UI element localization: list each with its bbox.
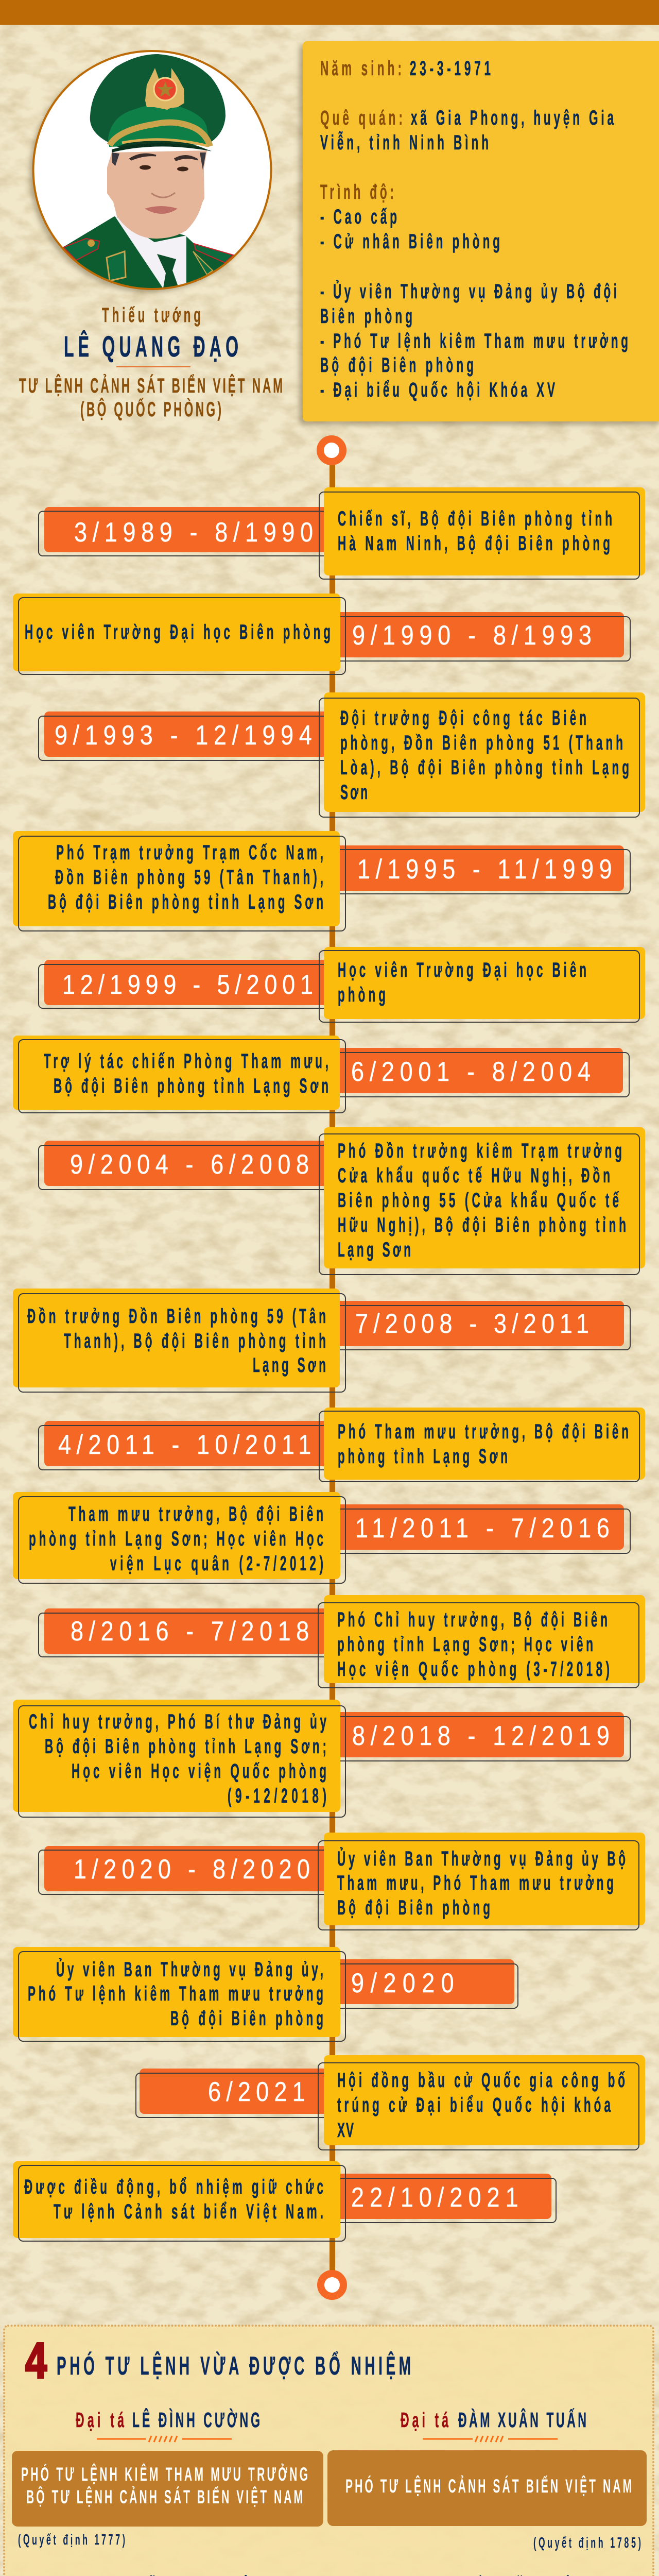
timeline entry 3/1989: Hà Nam Ninh, Bộ đội Biên phòng [338,532,610,555]
timeline entry 9/1993: Lòa), Bộ đội Biên phòng tỉnh Lạng [340,756,629,779]
timeline entry 9/2004: 9/2004 - 6/2008 [70,1149,309,1180]
timeline entry 22/10/2021: 22/10/2021 [351,2182,518,2213]
timeline entry 8/2018: Học viên Học viện Quốc phòng [72,1759,326,1783]
timeline entry 9/1993: Sơn [340,781,368,804]
timeline entry 6/2001: 6/2001 - 8/2004 [351,1057,591,1087]
timeline entry 8/2016: 8/2016 - 7/2018 [71,1616,309,1647]
panel: biography: xã Gia Phong, huyện Gia [411,106,614,129]
timeline entry 11/2011: phòng tỉnh Lạng Sơn; Học viên Học [29,1527,323,1550]
portrait photo [33,51,271,294]
timeline axis [330,453,335,2272]
timeline entry 8/2016: phòng tỉnh Lạng Sơn; Học viên [337,1633,593,1656]
person name: LÊ QUANG ĐẠO [64,330,238,363]
panel: biography: - Đại biểu Quốc hội Khóa XV [320,378,555,401]
timeline entry 22/10/2021: Được điều động, bổ nhiệm giữ chức [24,2175,323,2198]
timeline entry 4/2011: Phó Tham mưu trưởng, Bộ đội Biên [338,1420,629,1443]
timeline start marker [320,439,343,462]
timeline entry 9/1993: phòng, Đồn Biên phòng 51 (Thanh [340,731,623,754]
timeline entry 11/2011: 11/2011 - 7/2016 [355,1513,610,1544]
timeline entry 1/1995: 1/1995 - 11/1999 [357,854,612,885]
card: Đàm Xuân Tuấn: (Quyết định 1785) [533,2534,641,2551]
card: Lê Đình Cường: (Quyết định 1777) [18,2531,125,2548]
timeline entry 22/10/2021: Tư lệnh Cảnh sát biển Việt Nam. [54,2200,323,2223]
timeline entry 1/2020: Tham mưu, Phó Tham mưu trưởng [337,1871,614,1894]
timeline entry 9/1990: Học viên Trường Đại học Biên phòng [25,620,331,643]
timeline entry 3/1989 [39,487,645,579]
timeline entry 12/1999: phòng [338,983,386,1006]
timeline entry 9/2020: Bộ đội Biên phòng [170,2007,323,2030]
timeline entry 11/2011: viện Lục quân (2-7/2012) [110,1552,323,1575]
timeline entry 9/1990 [13,594,630,674]
timeline entry 1/1995: Bộ đội Biên phòng tỉnh Lạng Sơn [48,890,323,913]
panel: biography: - Cử nhân Biên phòng [320,230,500,253]
top bar [0,0,659,25]
timeline entry 6/2021: trúng cử Đại biểu Quốc hội khóa [337,2093,611,2116]
panel: biography: Biên phòng [320,304,412,328]
timeline entry 6/2001: Trợ lý tác chiến Phòng Tham mưu, [44,1049,328,1073]
timeline entry 7/2008 [13,1289,630,1392]
heading: PHÓ TƯ LỆNH VỪA ĐƯỢC BỔ NHIỆM [57,2350,411,2380]
card: Lê Đình Cường: LÊ ĐÌNH CƯỜNG [132,2408,260,2432]
panel: biography: - Phó Tư lệnh kiêm Tham mưu trưởng [320,329,628,352]
timeline entry 22/10/2021 [13,2161,556,2241]
timeline entry 8/2018 [13,1700,630,1817]
timeline entry 12/1999: Học viên Trường Đại học Biên [338,958,586,981]
heading number: 4 [25,2333,47,2388]
panel: biography: - Ủy viên Thường vụ Đảng ủy Bộ đội [320,279,617,303]
timeline entry 1/2020: Bộ đội Biên phòng [337,1896,490,1919]
timeline entry 8/2018: (9-12/2018) [228,1784,326,1807]
panel: biography: 23-3-1971 [410,57,491,80]
timeline entry 9/2004 [39,1127,645,1275]
timeline entry 3/1989: 3/1989 - 8/1990 [74,517,313,548]
card: Đàm Xuân Tuấn [327,2408,647,2551]
timeline entry 9/1993: Đội trưởng Đội công tác Biên [340,706,586,730]
card: Trần Văn Xuân [327,2575,645,2576]
timeline entry 6/2001: Bộ đội Biên phòng tỉnh Lạng Sơn [54,1074,328,1097]
panel: biography: Năm sinh: [320,57,402,80]
timeline entry 7/2008: 7/2008 - 3/2011 [355,1309,589,1339]
timeline entry 11/2011 [13,1492,630,1583]
timeline entry 9/2020 [13,1947,518,2041]
timeline entry 1/1995: Đồn Biên phòng 59 (Tân Thanh), [55,866,323,889]
timeline entry 6/2021: XV [337,2119,354,2142]
timeline entry 6/2001 [13,1036,629,1113]
timeline entry 3/1989: Chiến sĩ, Bộ đội Biên phòng tỉnh [338,507,612,530]
timeline entry 8/2018: Chỉ huy trưởng, Phó Bí thư Đảng ủy [29,1710,326,1733]
timeline entry 9/1993 [39,692,645,817]
timeline entry 9/1990: 9/1990 - 8/1993 [352,620,592,651]
timeline entry 9/2004: Phó Đồn trưởng kiêm Trạm trưởng [338,1139,622,1162]
timeline entry 4/2011 [39,1408,645,1482]
card: Đàm Xuân Tuấn: PHÓ TƯ LỆNH CẢNH SÁT BIỂN VIỆT NAM [345,2476,632,2497]
timeline entry 6/2021: Hội đồng bầu cử Quốc gia công bố [337,2069,625,2092]
card: Lê Đình Cường: BỘ TƯ LỆNH CẢNH SÁT BIỂN VIỆT NAM [26,2486,303,2508]
timeline entry 12/1999 [39,947,645,1022]
timeline entry 4/2011: 4/2011 - 10/2011 [58,1430,311,1460]
timeline entry 6/2021: 6/2021 [208,2077,305,2107]
timeline entry 7/2008: Thanh), Bộ đội Biên phòng tỉnh [64,1329,326,1352]
name divider [116,366,190,367]
card: Vũ Trung Kiên [12,2575,323,2576]
panel: deputy commanders [4,2326,653,2576]
timeline entry 8/2016: Học viện Quốc phòng (3-7/2018) [337,1657,610,1681]
timeline entry 9/2004: Hữu Nghị), Bộ đội Biên phòng tỉnh [338,1213,626,1236]
panel: biography [303,41,659,421]
timeline entry 7/2008: Đồn trưởng Đồn Biên phòng 59 (Tân [27,1304,326,1328]
timeline entry 9/2020: Phó Tư lệnh kiêm Tham mưu trưởng [28,1982,323,2005]
timeline entry 7/2008: Lạng Sơn [253,1353,326,1377]
timeline end marker [321,2274,343,2296]
panel: biography: Trình độ: [320,180,394,204]
person position [19,374,283,421]
card: Đàm Xuân Tuấn: ĐÀM XUÂN TUẤN [458,2408,586,2432]
timeline entry 9/2020: Ủy viên Ban Thường vụ Đảng ủy, [56,1957,323,1981]
timeline entry 9/2004: Biên phòng 55 (Cửa khẩu Quốc tế [338,1189,619,1212]
timeline entry 1/1995 [13,831,630,931]
panel: biography: Bộ đội Biên phòng [320,353,474,377]
person position: TƯ LỆNH CẢNH SÁT BIỂN VIỆT NAM [19,374,283,397]
person rank: Thiếu tướng [102,303,201,327]
timeline entry 4/2011: phòng tỉnh Lạng Sơn [338,1445,508,1468]
timeline entry 9/2004: Lạng Sơn [338,1238,411,1261]
timeline entry 1/2020 [39,1833,645,1930]
timeline entry 12/1999: 12/1999 - 5/2001 [62,970,313,1000]
timeline entry 9/2004: Cửa khẩu quốc tế Hữu Nghị, Đồn [338,1164,610,1187]
timeline entry 9/1993: 9/1993 - 12/1994 [55,720,312,751]
timeline entry 6/2021 [136,2055,645,2150]
card: Lê Đình Cường: Đại tá [76,2409,124,2432]
timeline entry 9/2020: 9/2020 [351,1968,454,1998]
timeline entry 1/2020: 1/2020 - 8/2020 [74,1854,310,1885]
timeline entry 8/2018: Bộ đội Biên phòng tỉnh Lạng Sơn; [45,1735,326,1758]
timeline entry 1/1995: Phó Trạm trưởng Trạm Cốc Nam, [56,841,323,864]
timeline entry 8/2018: 8/2018 - 12/2019 [352,1721,610,1751]
person position: (BỘ QUỐC PHÒNG) [80,397,221,421]
card: Đàm Xuân Tuấn: Đại tá [401,2409,448,2432]
panel: biography: Viễn, tỉnh Ninh Bình [320,130,489,154]
timeline entry 1/2020: Ủy viên Ban Thường vụ Đảng ủy Bộ [337,1846,626,1870]
card: Lê Đình Cường: PHÓ TƯ LỆNH KIÊM THAM MƯU TRƯỞNG [21,2464,308,2485]
timeline entry 8/2016 [39,1595,645,1688]
card: Lê Đình Cường [12,2408,323,2548]
timeline entry 11/2011: Tham mưu trưởng, Bộ đội Biên [68,1502,323,1526]
panel: biography: - Cao cấp [320,205,397,228]
panel: biography: Quê quán: [320,106,403,129]
timeline entry 8/2016: Phó Chỉ huy trưởng, Bộ đội Biên [337,1608,608,1631]
